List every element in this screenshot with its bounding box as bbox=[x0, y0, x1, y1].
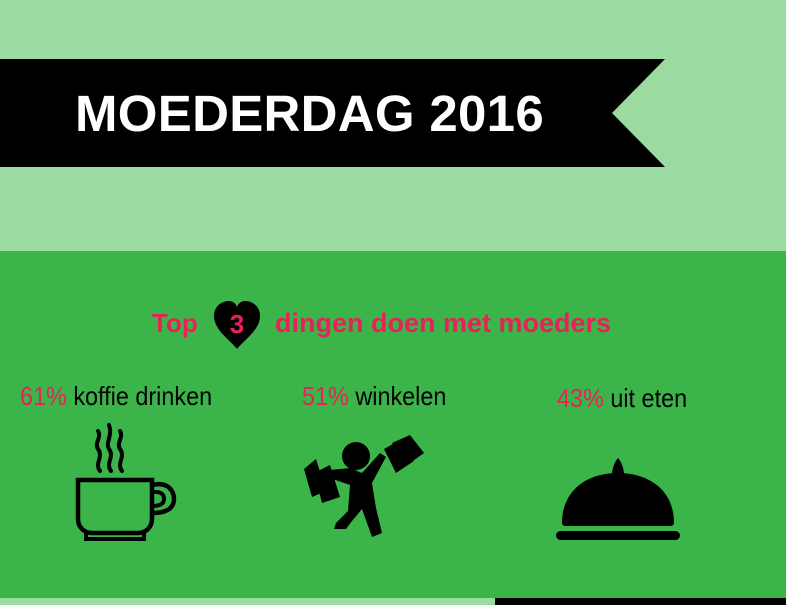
heading: Top bbox=[152, 308, 198, 338]
heading: dingen doen met moeders bbox=[275, 308, 611, 338]
banner bbox=[0, 59, 665, 167]
icon: shopper bbox=[304, 435, 424, 537]
icon: coffee cup bbox=[76, 423, 176, 541]
icon: heart: 3 bbox=[230, 309, 244, 339]
icon: heart bbox=[214, 301, 260, 349]
heading bbox=[152, 301, 611, 349]
text: winkelen: 51% winkelen bbox=[302, 381, 446, 411]
text: koffie: 61% koffie drinken bbox=[20, 381, 212, 411]
bottom strip bbox=[495, 598, 786, 605]
panel: top 3 bbox=[0, 251, 786, 598]
title: MOEDERDAG 2016 bbox=[75, 85, 544, 142]
icon: cloche bbox=[556, 458, 680, 540]
top band bbox=[0, 0, 786, 251]
text: uit eten: 43% uit eten bbox=[557, 383, 687, 413]
